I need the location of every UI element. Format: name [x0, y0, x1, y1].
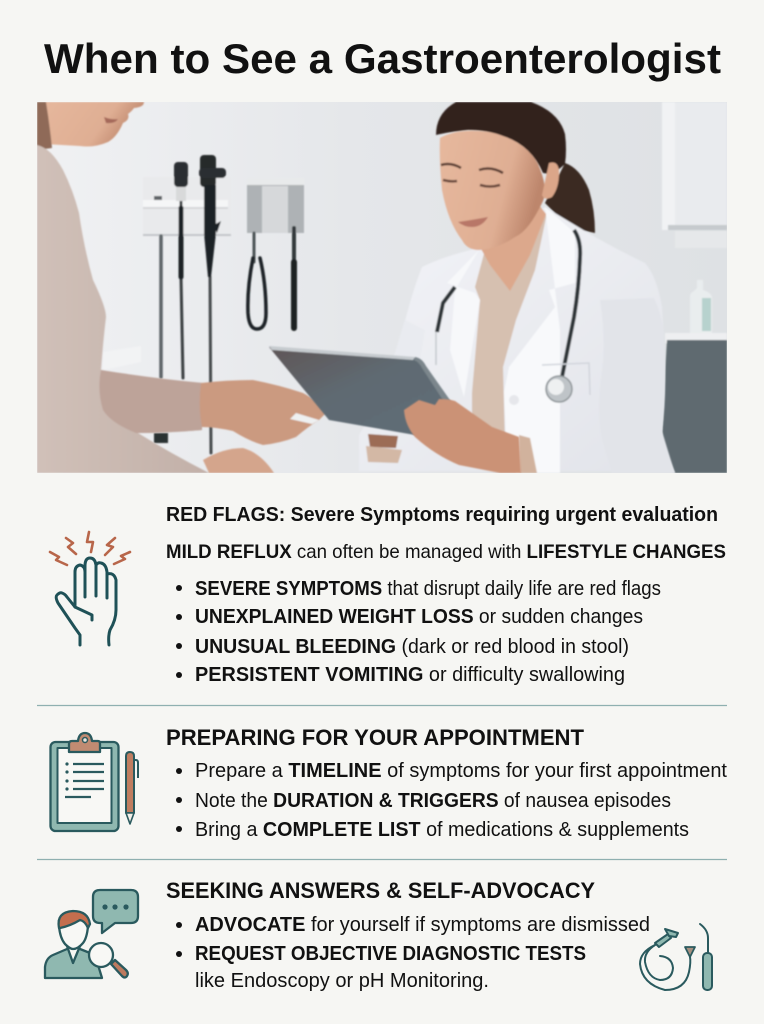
bullet list: preparing: Bring a COMPLETE LIST of medications & supplements: [195, 819, 689, 841]
counter and sanitizer bottle: [665, 280, 727, 343]
doctor far wrist and cuff: [368, 434, 398, 448]
photo: doctor showing tablet to patient: [37, 102, 727, 473]
coat pocket edge and button: [542, 363, 590, 395]
tan cuff: [519, 435, 537, 473]
bullet list: red flags: [176, 578, 661, 686]
bullet list: seeking answers: [176, 914, 650, 992]
bullet list: preparing: Note the DURATION & TRIGGERS of nausea episodes: [195, 790, 671, 812]
subheading: mild reflux: MILD REFLUX can often be managed with LIFESTYLE CHANGES: [166, 541, 726, 563]
otoscope and endoscope heads: [174, 155, 226, 277]
ear: [542, 162, 559, 199]
hanging scope cables: [161, 200, 294, 453]
side table: [103, 346, 141, 370]
bullet list: red flags: UNEXPLAINED WEIGHT LOSS or sudden changes: [195, 606, 643, 628]
shirt: [472, 213, 547, 445]
bullet list: preparing: Prepare a TIMELINE of symptoms for your first appointment: [195, 760, 727, 782]
neck and chest: [480, 205, 546, 291]
title: When to See a Gastroenterologist: [44, 35, 721, 82]
ponytail: [545, 163, 595, 233]
bullet list: preparing: [176, 760, 727, 841]
icon: hand with pain bolts: [50, 532, 130, 645]
section 2: preparing: [50, 725, 727, 841]
bullet list: seeking answers: ADVOCATE for yourself if symptoms are dismissed: [195, 914, 650, 936]
icon: clipboard and pen: [50, 733, 138, 831]
hair: [436, 102, 566, 176]
sweater arm and cuff: [99, 370, 203, 433]
stethoscope: [562, 230, 580, 377]
wall cabinet: [662, 102, 727, 230]
face: [440, 131, 545, 250]
patient: face, sweater and hands: [37, 102, 326, 473]
patient open hand: [200, 380, 326, 445]
tablet: [269, 346, 457, 435]
heading: seeking answers: SEEKING ANSWERS & SELF-ADVOCACY: [166, 878, 595, 903]
bullet list: seeking answers: like Endoscopy or pH Monitoring.: [195, 970, 489, 992]
doctor: coat, shirt, head and hair: [359, 102, 675, 473]
bullet list: seeking answers: REQUEST OBJECTIVE DIAGNOSTIC TESTS: [195, 943, 586, 965]
grey chair: [662, 340, 727, 473]
bullet list: red flags: SEVERE SYMPTOMS that disrupt daily life are red flags: [195, 578, 661, 600]
bullet list: red flags: UNUSUAL BLEEDING (dark or red blood in stool): [195, 636, 629, 658]
icon: endoscope and pH probe: [640, 924, 712, 990]
section 1: red flags: [50, 503, 726, 686]
doctor hand holding tablet: [404, 399, 521, 473]
lapels: [504, 207, 575, 473]
icon: person with magnifier and speech bubble: [45, 890, 138, 978]
wall instrument panels: [143, 177, 304, 236]
coat: [359, 207, 674, 471]
bullet list: red flags: PERSISTENT VOMITING or difficulty swallowing: [195, 664, 625, 686]
section 3: self-advocacy: [45, 878, 712, 992]
heading: red flags: RED FLAGS: Severe Symptoms requiring urgent evaluation: [166, 503, 718, 526]
heading: preparing: PREPARING FOR YOUR APPOINTMENT: [166, 725, 585, 750]
sweater body: [37, 145, 209, 473]
